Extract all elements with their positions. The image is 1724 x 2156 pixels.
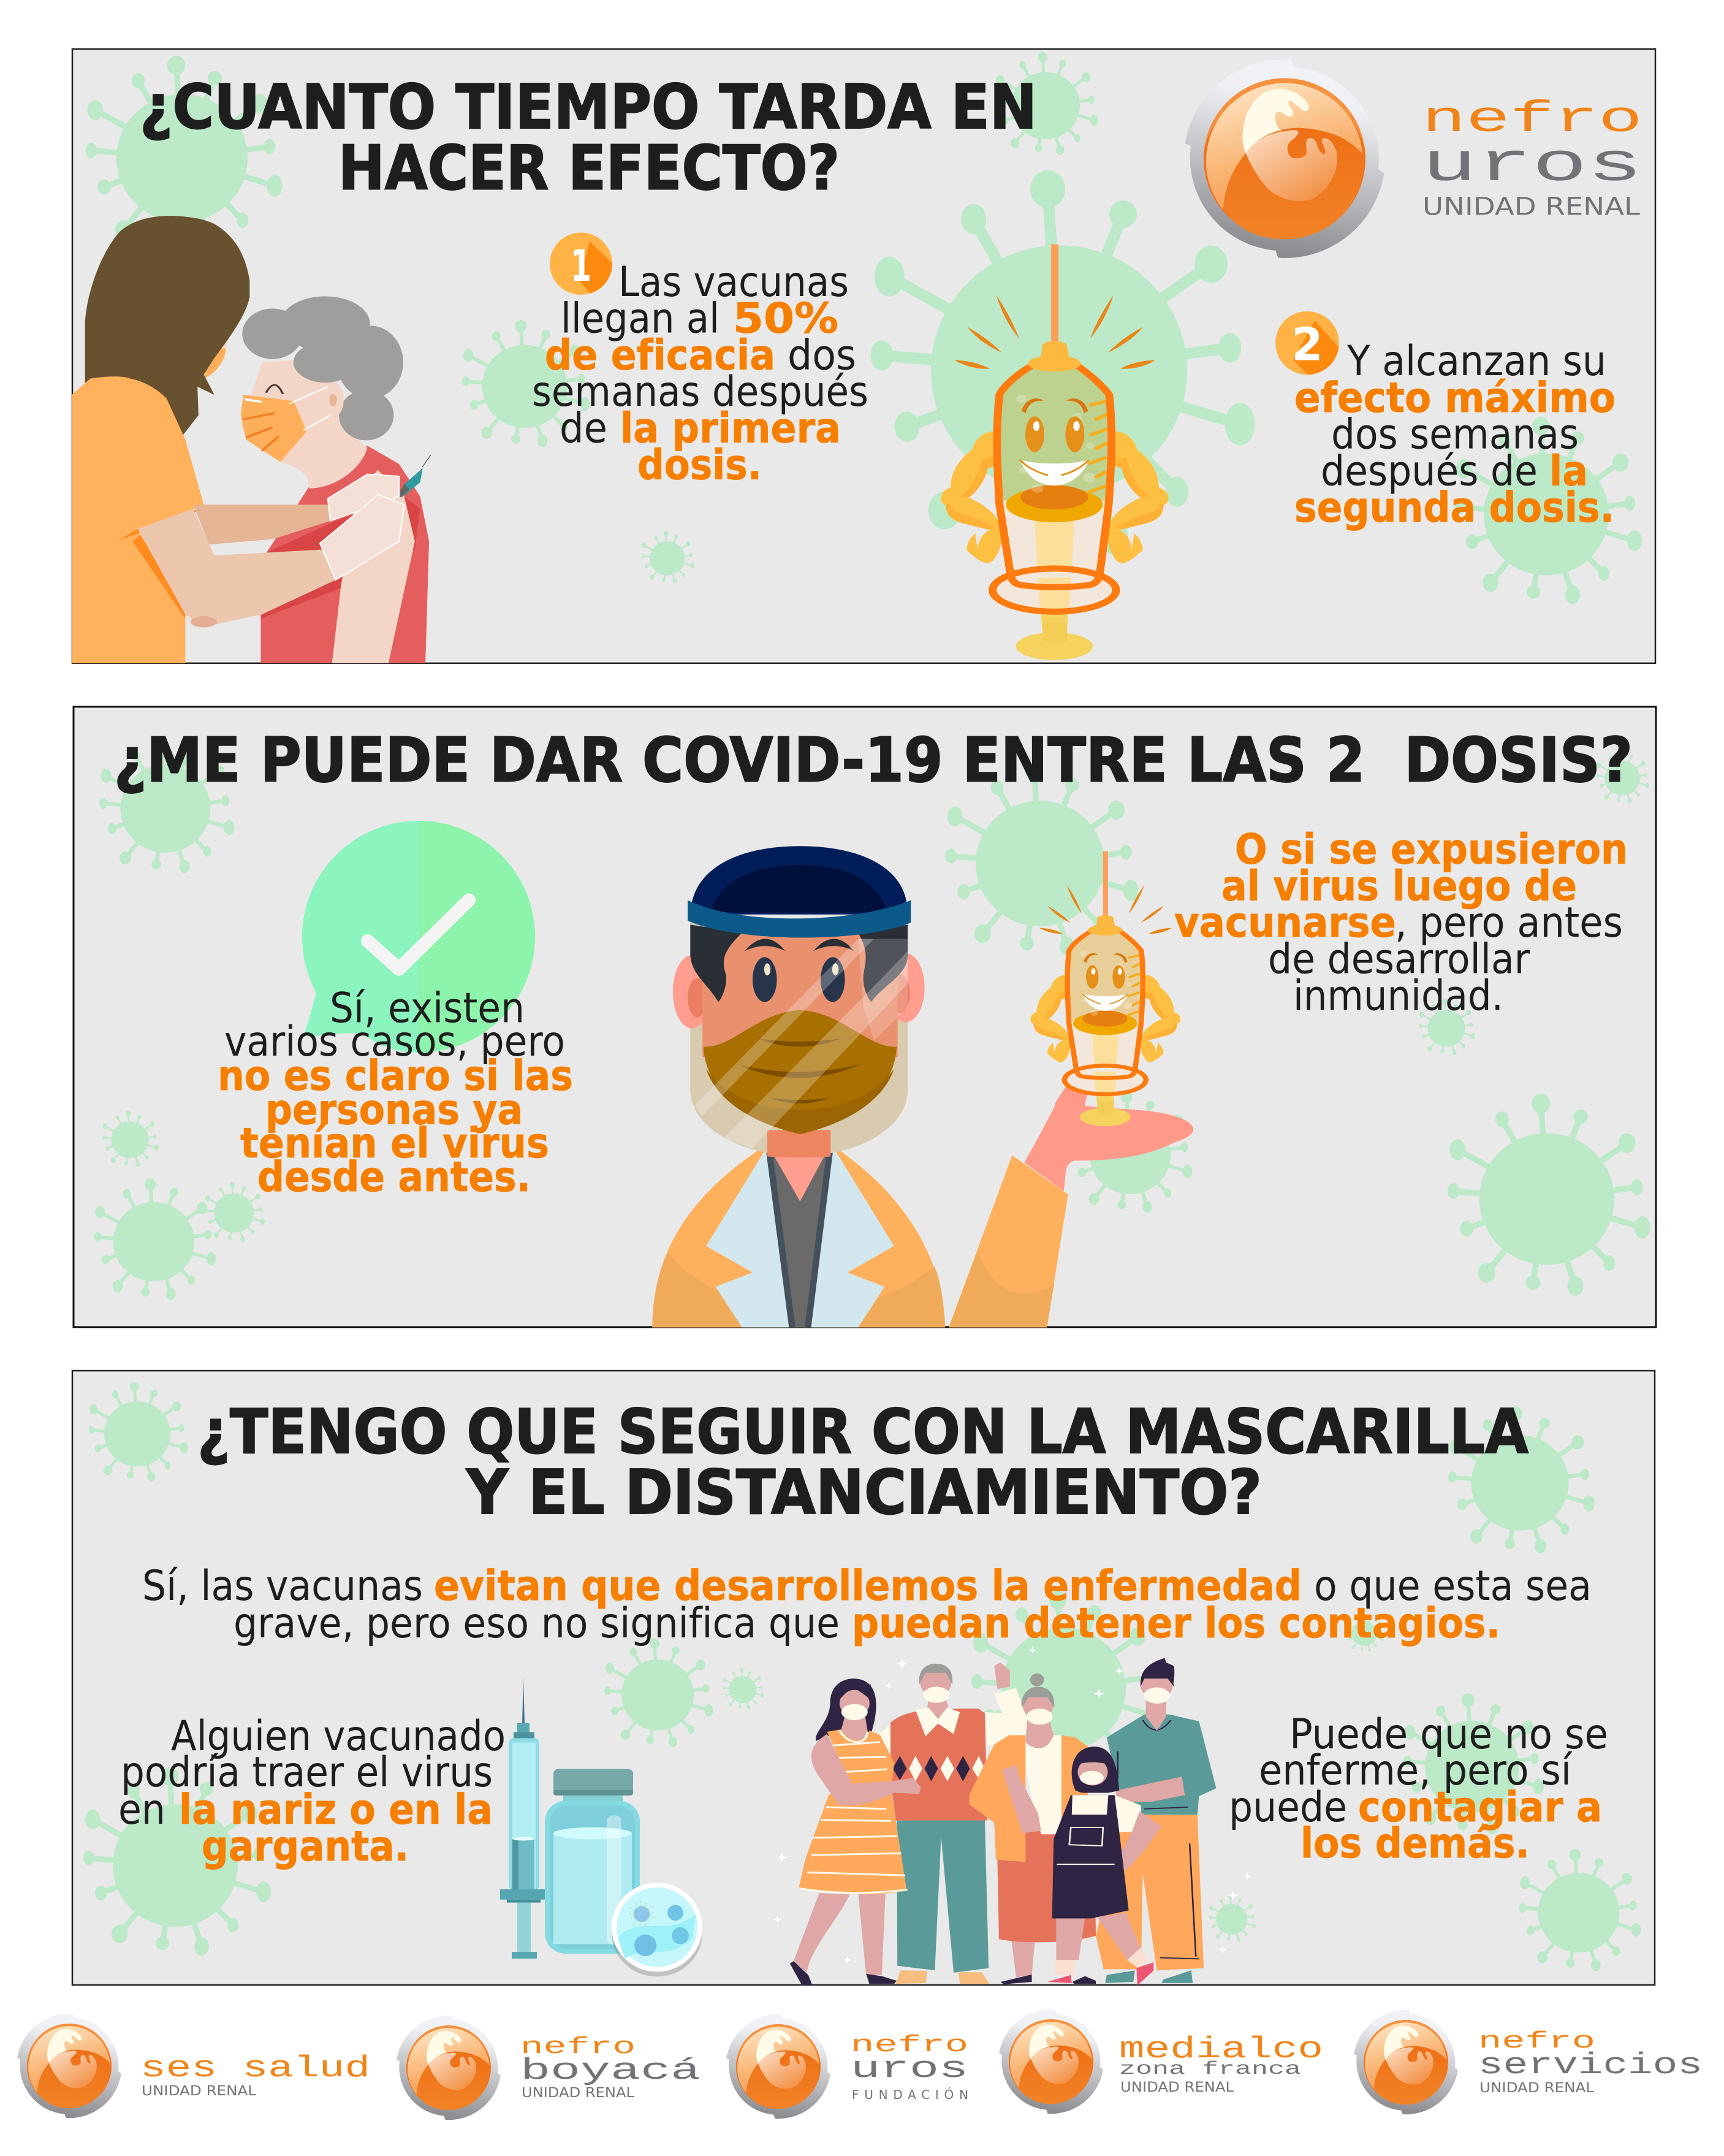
title [140,71,1037,204]
logo: nefro boyacá: nefro [520,2034,636,2060]
text block: sí existen varios casos: desde antes. [257,1152,531,1201]
text block: primera dosis: semanas después [532,367,868,416]
text block: las vacunas evitan: evitan que desarrollemos la enfermedad [434,1562,1302,1610]
text block: las vacunas evitan: Sí, las vacunas [142,1562,423,1610]
hombre de verde [1096,1658,1216,1983]
text block: primera dosis: Las vacunas [618,257,849,306]
illustration: jeringa, frasco y placa con virus [500,1677,702,1976]
panel: cuánto tiempo tarda en hacer efecto [72,49,1655,663]
illustration: enfermera vacunando a paciente [72,216,431,663]
text block: las vacunas evitan: puedan detener los contagios. [852,1599,1500,1648]
panel: me puede dar covid entre las dos dosis [74,707,1656,1327]
logo: nefro uros fundación: uros [851,2052,968,2086]
text block: segunda dosis: la [1549,446,1588,495]
badge: number 2 [1275,311,1342,378]
text block: alguien vacunado: en [118,1786,165,1834]
text block: primera dosis: de [560,404,607,452]
illustration: médico con careta [652,846,945,1327]
text block: primera dosis: llegan al [561,294,720,343]
logo: nefro boyacá: UNIDAD RENAL [522,2086,635,2101]
text block: sí existen varios casos: no es claro si las [218,1051,573,1100]
text block: puede que no se enferme: Puede que no se [1289,1710,1608,1759]
logo: ses salud: ses salud [140,2051,370,2086]
badge: number 1: 1 [571,240,591,291]
logo: medialco zona franca: zona franca [1119,2059,1301,2080]
text block: sí existen varios casos [218,984,573,1201]
logo: ses salud: UNIDAD RENAL [142,2084,257,2099]
text block: puede que no se enferme: los demás. [1301,1819,1530,1868]
hombre de chaleco [879,1663,1032,1984]
text block: primera dosis: 50% [733,294,838,343]
text block: segunda dosis: segunda dosis. [1294,483,1614,531]
text block: o si se expusieron [1174,825,1628,1019]
logo: medialco zona franca [999,2009,1323,2114]
text block: o si se expusieron: vacunarse [1174,898,1396,947]
logo: medialco zona franca: UNIDAD RENAL [1120,2080,1234,2095]
text block: o si se expusieron: , pero antes [1395,898,1623,947]
logo: nefrouros unidad renal: nefro [1422,94,1642,145]
logo: nefro servicios: servicios [1478,2048,1703,2082]
text block: segunda dosis: dos semanas [1331,410,1579,459]
text block: sí existen varios casos: Sí, existen [330,984,525,1032]
badge: number 1 [550,232,613,295]
logo: ses salud [17,2014,370,2118]
text block: segunda dosis [1294,337,1616,531]
logo: nefro uros fundación: FUNDACIÓN [852,2087,968,2102]
logo: nefro boyacá [397,2016,701,2120]
text block: sí existen varios casos: tenían el virus [240,1119,549,1167]
text block: primera dosis: dosis. [637,441,762,489]
text block: o si se expusieron: O si se expusieron [1235,825,1628,874]
text block: primera dosis: la primera [620,404,841,452]
text block: alguien vacunado: podría traer el virus [121,1748,493,1797]
text block: sí existen varios casos: varios casos, pero [224,1017,565,1065]
title: ¿TENGO QUE SEGUIR CON LA MASCARILLA [197,1396,1528,1468]
title: HACER EFECTO? [338,132,840,204]
text block: primera dosis [532,257,868,489]
icon: speech bubble with check [302,821,535,1053]
text block: las vacunas evitan: o que esta sea [1314,1562,1592,1610]
badge: number 2: 2 [1291,319,1323,371]
mujer mayor [970,1674,1096,1984]
title [197,1396,1528,1528]
background viruses [94,738,1650,1300]
text block: segunda dosis: Y alcanzan su [1346,337,1606,385]
logo: nefro servicios: UNIDAD RENAL [1479,2081,1595,2096]
logo: medialco zona franca: medialco [1119,2032,1323,2066]
background viruses [86,52,1642,604]
logo: nefrouros unidad renal: UNIDAD RENAL [1422,193,1641,221]
text block: alguien vacunado [118,1712,506,1871]
text block: o si se expusieron: inmunidad. [1293,972,1503,1019]
text block: o si se expusieron: de desarrollar [1268,935,1530,983]
logo: nefro uros fundación: nefro [851,2032,968,2059]
text block: las vacunas evitan [142,1562,1592,1648]
text block: primera dosis: dos [788,330,856,379]
logo: nefro uros fundación [726,2014,968,2119]
logo: nefro servicios: nefro [1478,2028,1595,2055]
text block: puede que no se enferme: enferme, pero sí [1259,1747,1573,1795]
illustration: jeringa en la mano [1030,851,1180,1126]
text block: segunda dosis: después de [1321,446,1538,495]
logo: nefrouros unidad renal [1185,59,1642,258]
logo: nefrouros unidad renal: uros [1422,134,1642,197]
niña con overol [1047,1747,1161,1986]
text block: alguien vacunado: la nariz o en la [179,1786,493,1834]
title: Y EL DISTANCIAMIENTO? [466,1457,1262,1528]
text block: puede que no se enferme [1229,1710,1608,1868]
illustration: mano y manga [949,1070,1193,1327]
text block: primera dosis: de eficacia [545,330,775,379]
panel: seguir con la mascarilla y el distanciamiento [72,1371,1655,1986]
logo: nefro boyacá: boyacá [520,2054,701,2088]
text block: las vacunas evitan: grave, pero eso no significa que [234,1599,840,1648]
text block: alguien vacunado: Alguien vacunado [171,1712,506,1761]
text block: puede que no se enferme: contagiar a [1358,1783,1602,1832]
illustration: jeringa sonriente [941,244,1168,660]
title: ¿CUANTO TIEMPO TARDA EN [140,71,1037,143]
text block: sí existen varios casos: personas ya [265,1086,523,1133]
title: ¿ME PUEDE DAR COVID-19 ENTRE LAS 2 DOSIS? [114,725,1633,796]
mujer de vestido [790,1678,921,1986]
logo: nefro servicios [1354,2010,1703,2114]
background viruses [83,1382,1641,1971]
illustration: familia con mascarillas [773,1647,1252,1986]
text block: puede que no se enferme: puede [1229,1783,1347,1832]
text block: segunda dosis: efecto máximo [1294,373,1616,422]
text block: alguien vacunado: garganta. [202,1823,409,1871]
text block: o si se expusieron: al virus luego de [1221,862,1577,910]
